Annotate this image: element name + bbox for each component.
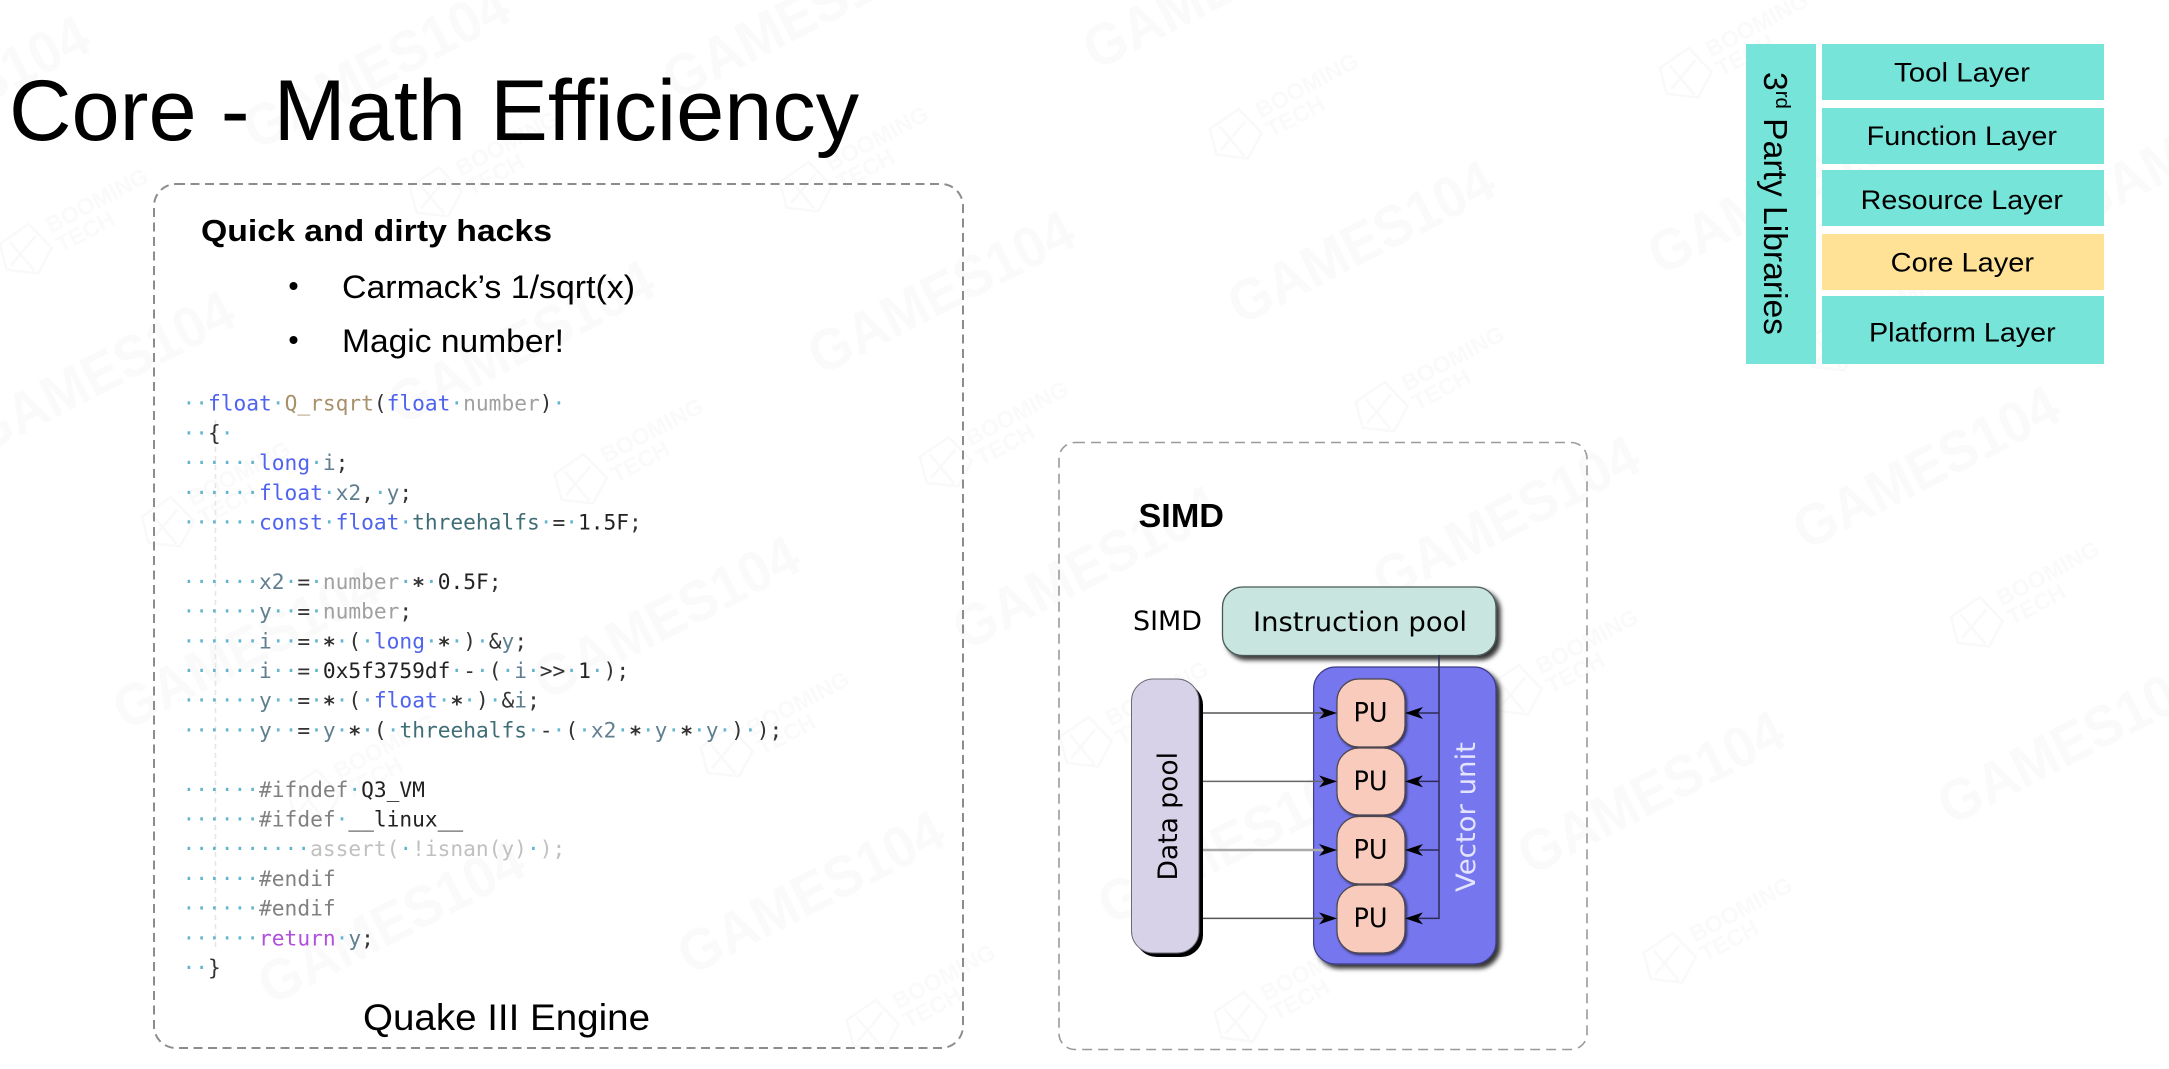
instruction pool box: Instruction pool bbox=[1253, 607, 1467, 638]
processing units: PU bbox=[1354, 766, 1388, 797]
infographic: Core - Math Efficiency: BOOMING bbox=[1397, 320, 1509, 396]
arrows: data pool to PUs bbox=[1203, 707, 1337, 924]
infographic: Core - Math Efficiency: BOOMING bbox=[1256, 930, 1368, 1006]
processing units: PU bbox=[1354, 698, 1388, 728]
data pool box bbox=[1132, 679, 1203, 957]
infographic: Core - Math Efficiency: BOOMING bbox=[183, 435, 295, 511]
infographic: Core - Math Efficiency: BOOMING bbox=[1531, 603, 1643, 679]
panel heading: Quick and dirty hacks bbox=[201, 213, 552, 248]
infographic: Core - Math Efficiency: TECH bbox=[898, 981, 966, 1034]
code block: Q_rsqrt: ······y··=·y·*·(·threehalfs·-·(·x2·*·y·*·y·)·); bbox=[182, 717, 782, 746]
processing units: PU bbox=[1354, 903, 1388, 934]
infographic: Core - Math Efficiency: BOOMING bbox=[596, 392, 708, 468]
code block: Q_rsqrt: ··} bbox=[182, 955, 221, 980]
infographic: Core - Math Efficiency: TECH bbox=[461, 148, 529, 201]
infographic: Core - Math Efficiency: TECH bbox=[1711, 29, 1779, 82]
code block: Q_rsqrt: ······return·y; bbox=[182, 925, 374, 950]
infographic: Core - Math Efficiency: GAMES104 bbox=[1637, 98, 1925, 287]
infographic: Core - Math Efficiency: TECH bbox=[1695, 914, 1763, 967]
infographic: Core - Math Efficiency: GAMES104 bbox=[102, 553, 390, 742]
infographic: Core - Math Efficiency: TECH bbox=[971, 418, 1039, 471]
instruction pool box bbox=[1222, 587, 1496, 656]
core layer highlighted: Core Layer bbox=[1891, 248, 2034, 278]
code block: Q_rsqrt: ······y··=·number; bbox=[182, 599, 412, 624]
title: Core - Math Efficiency bbox=[9, 63, 859, 159]
function layer: Function Layer bbox=[1867, 121, 2057, 151]
3rd party libraries column: Party Libraries bbox=[1757, 109, 1794, 335]
infographic: Core - Math Efficiency: GAMES104 bbox=[1362, 423, 1650, 612]
bullet list: Magic number! bbox=[342, 323, 564, 359]
code block: Q_rsqrt: ······const·float·threehalfs·=·1.5F; bbox=[182, 510, 642, 534]
code block: Q_rsqrt bbox=[182, 391, 782, 980]
infographic: Core - Math Efficiency: GAMES104 bbox=[667, 798, 955, 987]
infographic: Core - Math Efficiency: TECH bbox=[339, 751, 407, 804]
SIMD heading: SIMD bbox=[1138, 497, 1224, 534]
engine layer stack bbox=[1746, 44, 2104, 364]
code block: Q_rsqrt: ······#ifdef·__linux__ bbox=[182, 806, 463, 832]
infographic: Core - Math Efficiency: TECH bbox=[2002, 578, 2070, 631]
infographic: Core - Math Efficiency: BOOMING bbox=[1251, 47, 1363, 123]
infographic: Core - Math Efficiency: GAMES104 bbox=[247, 828, 535, 1017]
code block: Q_rsqrt: ······float·x2,·y; bbox=[182, 480, 412, 505]
code block: Q_rsqrt: ······long·i; bbox=[182, 450, 348, 475]
infographic: Core - Math Efficiency: BOOMING bbox=[1101, 655, 1213, 731]
3rd party libraries column: rd bbox=[1771, 91, 1793, 109]
code block: Q_rsqrt: ······#endif bbox=[182, 866, 336, 891]
infographic: Core - Math Efficiency: TECH bbox=[1407, 363, 1475, 416]
bullet list: Carmack’s 1/sqrt(x) bbox=[342, 269, 635, 305]
infographic: Core - Math Efficiency: TECH bbox=[752, 708, 820, 761]
code block: Q_rsqrt: ······i··=·*·(·long·*·)·&y; bbox=[182, 628, 527, 657]
infographic: Core - Math Efficiency: BOOMING bbox=[329, 708, 441, 784]
infographic: Core - Math Efficiency: TECH bbox=[831, 143, 899, 196]
code block: Q_rsqrt: ······y··=·*·(·float·*·)·&i; bbox=[182, 688, 540, 717]
infographic: Core - Math Efficiency: BOOMING bbox=[1847, 259, 1959, 335]
infographic: Core - Math Efficiency: GAMES104 bbox=[942, 473, 1230, 662]
processing units bbox=[1337, 679, 1405, 953]
infographic: Core - Math Efficiency: TECH bbox=[1261, 90, 1329, 143]
platform layer: Platform Layer bbox=[1869, 318, 2056, 348]
resource layer bbox=[1822, 170, 2104, 226]
SIMD diagram bbox=[1132, 587, 1496, 964]
3rd party libraries column bbox=[1746, 44, 1816, 364]
infographic: Core - Math Efficiency: GAMES104 bbox=[1507, 698, 1795, 887]
code block: Q_rsqrt: ······#ifndef·Q3_VM bbox=[182, 777, 425, 802]
code block: Q_rsqrt: ······#endif bbox=[182, 896, 336, 921]
infographic: Core - Math Efficiency: TECH bbox=[1266, 973, 1334, 1026]
tool layer: Tool Layer bbox=[1894, 58, 2030, 88]
infographic: Core - Math Efficiency: GAMES104 bbox=[1087, 748, 1375, 937]
code block: Q_rsqrt: ··········assert(·!isnan(y)·); bbox=[182, 836, 565, 861]
infographic: Core - Math Efficiency: GAMES104 bbox=[797, 198, 1085, 387]
infographic: Core - Math Efficiency: GAMES104 bbox=[1782, 373, 2070, 562]
vector unit box: Vector unit bbox=[1451, 742, 1482, 892]
infographic: Core - Math Efficiency: BOOMING bbox=[1685, 871, 1797, 947]
infographic: Core - Math Efficiency: GAMES104 bbox=[377, 248, 665, 437]
infographic: Core - Math Efficiency: TECH bbox=[193, 478, 261, 531]
bullet list bbox=[290, 269, 635, 359]
code block: Q_rsqrt: ··{· bbox=[182, 420, 234, 445]
infographic: Core - Math Efficiency: BOOMING bbox=[41, 162, 153, 238]
infographic: Core - Math Efficiency: TECH bbox=[606, 435, 674, 488]
panel: quick and dirty hacks bbox=[154, 184, 963, 1048]
vector unit box bbox=[1314, 667, 1496, 964]
SIMD label: SIMD bbox=[1133, 606, 1202, 637]
processing units: PU bbox=[1354, 834, 1388, 866]
caption: Quake III Engine: Quake III Engine bbox=[363, 997, 650, 1038]
infographic: Core - Math Efficiency: BOOMING bbox=[961, 375, 1073, 451]
arrows: instruction pool to PUs bbox=[1405, 655, 1439, 924]
code block: Q_rsqrt: ··float·Q_rsqrt(float·number)· bbox=[182, 391, 565, 416]
infographic: Core - Math Efficiency: BOOMING bbox=[451, 105, 563, 181]
panel: SIMD bbox=[1059, 442, 1587, 1050]
infographic: Core - Math Efficiency: GAMES104 bbox=[522, 523, 810, 712]
code block: Q_rsqrt: ······x2·=·number·*·0.5F; bbox=[182, 569, 502, 598]
infographic: Core - Math Efficiency: BOOMING bbox=[821, 100, 933, 176]
infographic: Core - Math Efficiency: TECH bbox=[51, 205, 119, 258]
data pool box: Data pool bbox=[1153, 752, 1184, 880]
tool layer bbox=[1822, 44, 2104, 100]
infographic: Core - Math Efficiency: GAMES104 bbox=[1217, 148, 1505, 337]
infographic: Core - Math Efficiency: BOOMING bbox=[1992, 535, 2104, 611]
resource layer: Resource Layer bbox=[1861, 185, 2063, 215]
infographic: Core - Math Efficiency: TECH bbox=[1111, 698, 1179, 751]
infographic: Core - Math Efficiency: BOOMING bbox=[888, 938, 1000, 1014]
function layer bbox=[1822, 108, 2104, 164]
infographic: Core - Math Efficiency: TECH bbox=[1857, 302, 1925, 355]
platform layer bbox=[1822, 296, 2104, 364]
3rd party libraries column: 3 bbox=[1757, 72, 1794, 90]
infographic: Core - Math Efficiency: BOOMING bbox=[742, 665, 854, 741]
code block: Q_rsqrt: ······i··=·0x5f3759df·-·(·i·>>·1·); bbox=[182, 658, 629, 683]
core layer highlighted bbox=[1822, 234, 2104, 290]
infographic: Core - Math Efficiency: TECH bbox=[1541, 646, 1609, 699]
